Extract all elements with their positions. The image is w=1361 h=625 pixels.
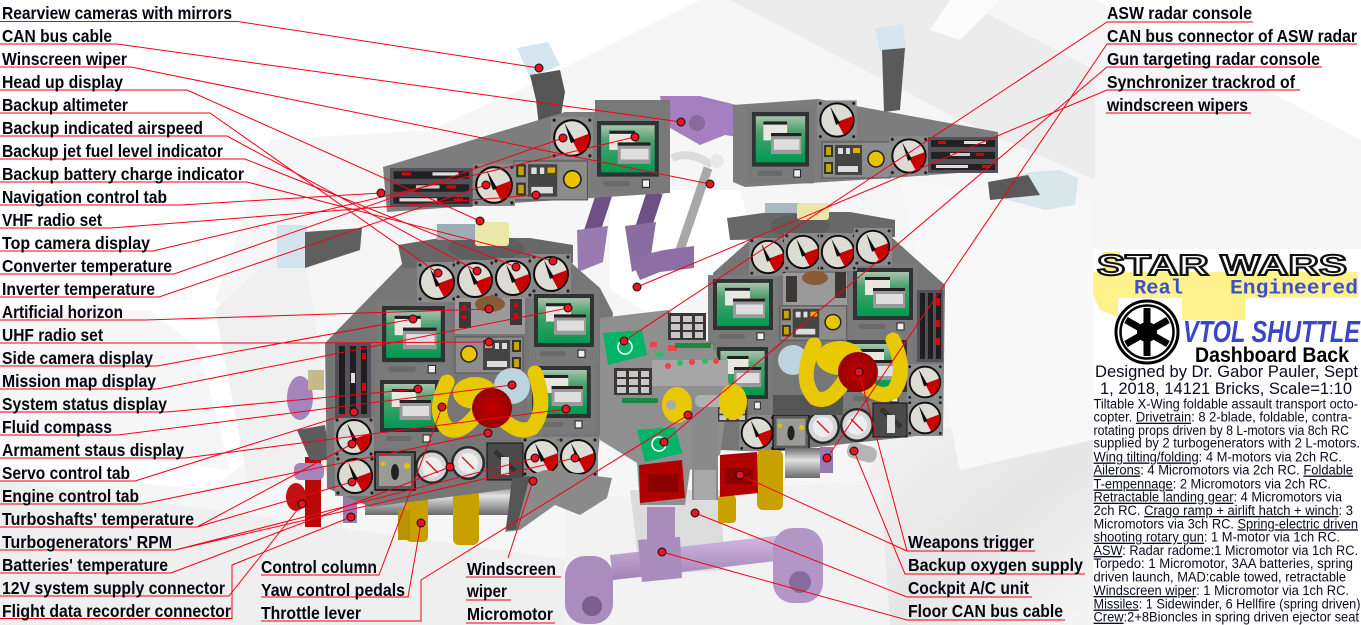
left dashboard screens [375, 290, 599, 448]
designer credit [1095, 363, 1358, 398]
upper right panel [733, 99, 998, 187]
left callout labels: Head up display [2, 72, 123, 92]
left callout labels: Mission map display [2, 371, 156, 391]
specification text: Retractable landing gear: 4 Micromotors via [1094, 490, 1343, 505]
bottom callout labels: Throttle lever [261, 603, 361, 623]
right horizon and indicators [783, 271, 847, 305]
red cockpit blocks [639, 452, 758, 503]
right instrument cluster [773, 403, 907, 449]
specification text: Wing tilting/folding: 4 M-motors via 2ch RC. [1094, 450, 1342, 464]
right glass compass [778, 345, 808, 375]
control strip [822, 142, 890, 178]
specification text: 2ch RC. Crago ramp + airlift hatch + winch: 3 [1094, 503, 1353, 518]
side cameras [277, 170, 1078, 268]
bottom callout labels: Windscreen [467, 559, 556, 579]
left callout labels [2, 3, 244, 621]
specification text: Ailerons: 4 Micromotors via 2ch RC. Foldable [1094, 462, 1353, 478]
left callout labels: Side camera display [2, 348, 153, 368]
radar console pads [603, 330, 682, 462]
imperial emblem [1116, 301, 1178, 363]
left callout labels: System status display [2, 394, 167, 414]
Real Engineered [1134, 278, 1358, 300]
Real Engineered: Real [1134, 278, 1183, 300]
gauges [817, 100, 929, 176]
Star Wars wordmark: STAR WARS [1097, 250, 1347, 282]
gauges [473, 117, 593, 206]
left callout labels: Backup indicated airspeed [2, 118, 203, 138]
specification text: Torpedo: 1 Micromotor, 3AA batteries, spring [1094, 556, 1353, 571]
top right callout labels: ASW radar console [1107, 3, 1252, 23]
left callout labels: 12V system supply connector [2, 578, 225, 598]
left callout labels: Converter temperature [2, 256, 172, 276]
bottom callout labels [261, 532, 1083, 624]
title block [1093, 249, 1361, 625]
left callout labels: Engine control tab [2, 486, 139, 506]
yellow pedal rings [662, 384, 747, 423]
windscreen wiper micromotor [505, 470, 612, 532]
right control panel [780, 306, 847, 340]
bottom instrument cluster [375, 443, 523, 490]
specification text: Windscreen wiper: 1 Micromotor via 1ch RC. [1094, 583, 1349, 598]
gray throttle stick [692, 395, 730, 500]
bottom callout labels: Micromotor [467, 604, 553, 624]
rearview cameras with mirrors [517, 24, 906, 135]
bottom callout labels: Control column [261, 557, 377, 577]
slots [928, 137, 998, 173]
specification text: Crew:2+8Bioncles in spring driven ejector seat [1094, 610, 1359, 625]
left callout labels: Servo control tab [2, 463, 130, 483]
Real Engineered: Engineered [1230, 278, 1358, 300]
center console [600, 310, 758, 505]
right lower gauges [739, 364, 943, 451]
purple linkage and wiper trackrod behind upper panels [577, 96, 757, 280]
left callout labels: CAN bus cable [2, 26, 112, 46]
left callout labels: Backup battery charge indicator [2, 164, 244, 184]
bottom callout labels: Backup oxygen supply [908, 555, 1083, 575]
keypads [614, 313, 747, 422]
left callout labels: Winscreen wiper [2, 49, 127, 69]
left callout labels: Flight data recorder connector [2, 601, 231, 621]
upper left panel [383, 100, 670, 212]
top right callout labels: Synchronizer trackrod of [1107, 72, 1295, 92]
red control stick and purple connectors [286, 370, 357, 527]
specification text: T-empennage: 2 Micromotors via 2ch RC. [1094, 476, 1331, 492]
right control yoke [806, 340, 900, 399]
specification text: driven launch, MAD:cable towed, retractable [1094, 570, 1346, 584]
left callout labels: Top camera display [2, 233, 150, 253]
left callout labels: Navigation control tab [2, 187, 167, 207]
yellow head up display right [765, 203, 829, 220]
left callout labels: Turbogenerators' RPM [2, 532, 172, 552]
control panel [455, 337, 523, 373]
right lower parts: cylinder, A/C connector, levers [718, 441, 878, 523]
top right callout labels [1106, 3, 1357, 115]
left callout labels: Turboshafts' temperature [2, 509, 194, 529]
top right callout labels: windscreen wipers [1106, 95, 1248, 115]
slot panel [335, 343, 371, 418]
yellow head up display [437, 222, 509, 246]
control strip [514, 161, 587, 200]
bottom callout labels: Weapons trigger [908, 532, 1034, 552]
side and lower gauges [334, 417, 598, 496]
bottom callout labels: Yaw control pedals [261, 580, 405, 600]
left control yoke [440, 373, 541, 430]
bottom callout labels: Cockpit A/C unit [908, 578, 1029, 598]
upper right slot area below panel [773, 395, 843, 415]
right dashboard [708, 203, 945, 452]
top right callout labels: Gun targeting radar console [1107, 49, 1320, 69]
left lower gray cylinder and levers [365, 483, 515, 545]
left callout labels: VHF radio set [2, 210, 102, 230]
specification text: Micromotors via 3ch RC. Spring-electric driven [1094, 516, 1358, 531]
caliper logo background [1093, 252, 1358, 320]
bottom callout labels: Floor CAN bus cable [908, 601, 1063, 621]
specification text: copter. Drivetrain: 8 2-blade, foldable, contra- [1094, 410, 1352, 425]
designer credit: 1, 2018, 14121 Bricks, Scale=1:10 [1100, 380, 1352, 398]
left dashboard [325, 222, 613, 507]
left callout labels: Inverter temperature [2, 279, 155, 299]
top right screen [747, 108, 814, 183]
artificial horizon and indicators [455, 296, 525, 334]
left callout labels: Rearview cameras with mirrors [2, 3, 232, 23]
Dashboard Back: Dashboard Back [1195, 343, 1349, 367]
left callout labels: Batteries' temperature [2, 555, 168, 575]
callout dots [298, 64, 863, 556]
left callout labels: Backup jet fuel level indicator [2, 141, 223, 161]
left callout labels: Artificial horizon [2, 302, 123, 322]
right dashboard screens [708, 264, 918, 415]
purple floor bracket and cable [565, 507, 823, 624]
left callout labels: UHF radio set [2, 325, 103, 345]
bottom callout labels: wiper [466, 581, 507, 601]
top left screen [592, 117, 664, 194]
switch row [622, 342, 728, 403]
top gauge row [417, 254, 571, 302]
slots [390, 168, 473, 207]
designer credit: Designed by Dr. Gabor Pauler, Sept [1095, 363, 1358, 381]
left callout labels: Fluid compass [2, 417, 112, 437]
fluid compass [494, 368, 530, 404]
right slots [917, 290, 943, 362]
specification text: shooting rotary gun: 1 M-motor via 1ch RC. [1094, 530, 1340, 545]
left callout labels: Armament staus display [2, 440, 184, 460]
left callout labels: Backup altimeter [2, 95, 128, 115]
specification text [1094, 396, 1360, 625]
right top gauges [749, 228, 892, 276]
